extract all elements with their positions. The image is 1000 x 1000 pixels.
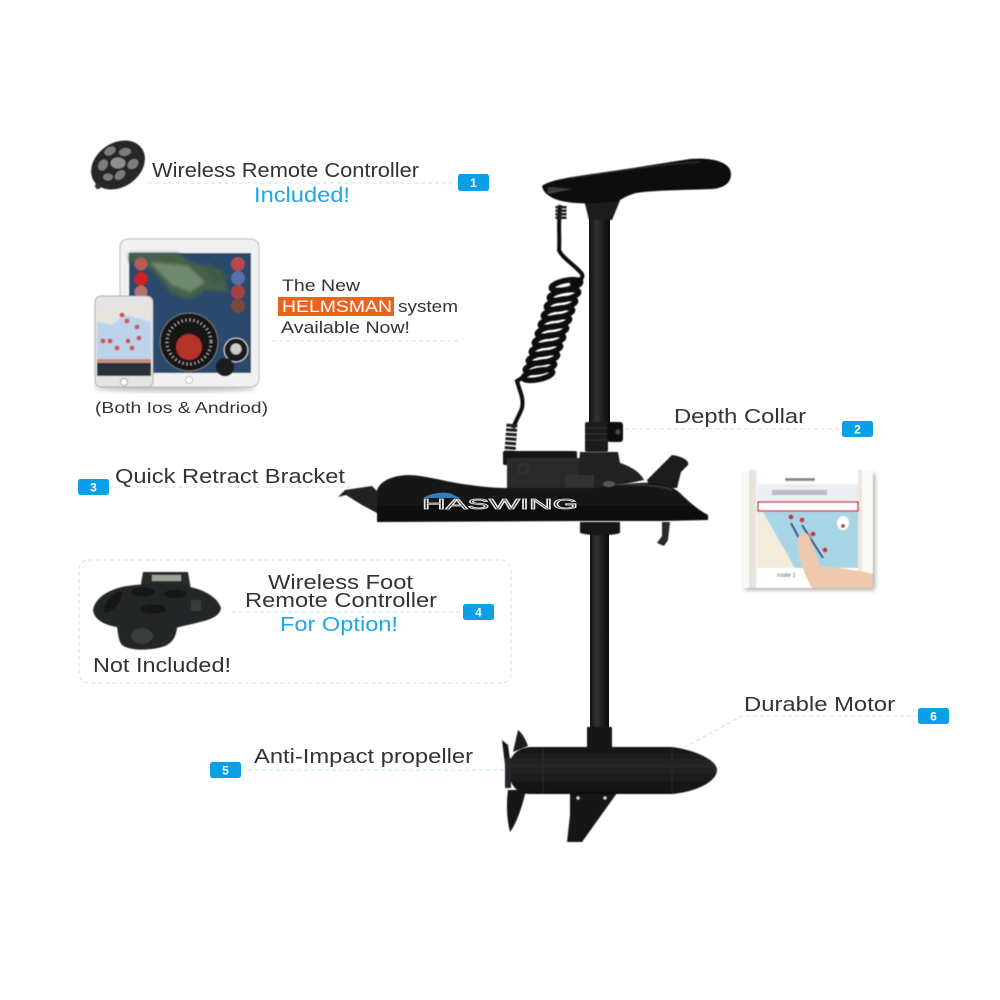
label: anti-impact propeller: Anti-Impact propeller bbox=[254, 746, 473, 768]
cable and coil bbox=[510, 205, 582, 452]
label: not included: Not Included! bbox=[93, 655, 231, 677]
badge 2: 2 bbox=[854, 422, 861, 436]
badge 5 bbox=[210, 762, 241, 778]
caption: both ios and android: (Both Ios & Andriod) bbox=[95, 400, 268, 417]
badge 3 bbox=[78, 479, 109, 495]
badge 2 bbox=[842, 421, 873, 437]
icon: foot pedal bbox=[93, 572, 221, 650]
label: available now: Available Now! bbox=[281, 318, 410, 337]
motor unit bbox=[502, 727, 717, 842]
badge 4 bbox=[463, 604, 494, 620]
badge 6: 6 bbox=[930, 710, 937, 724]
image: app route planning screenshot: route 1 bbox=[777, 573, 796, 579]
image: app route planning screenshot bbox=[743, 470, 875, 590]
panel: wireless foot remote controller bbox=[79, 560, 511, 683]
control box bbox=[503, 451, 644, 490]
label: the new: The New bbox=[282, 276, 361, 295]
shaft lower bbox=[590, 530, 609, 730]
badge 1: 1 bbox=[470, 176, 477, 190]
icon: wireless remote controller bbox=[82, 130, 154, 200]
label: included: Included! bbox=[254, 184, 350, 207]
image: helmsman app on tablet and phone bbox=[93, 239, 259, 392]
label: wireless foot: Wireless Foot bbox=[268, 572, 414, 594]
label: wireless remote controller: Wireless Remote Controller bbox=[152, 160, 419, 182]
label: quick retract bracket: Quick Retract Bracket bbox=[115, 466, 346, 488]
shaft upper bbox=[589, 218, 610, 424]
label: system: system bbox=[398, 297, 458, 316]
quick retract bracket body bbox=[338, 455, 708, 546]
depth collar bbox=[585, 422, 623, 452]
logo: haswing: HASWING bbox=[422, 496, 578, 513]
badge 4: 4 bbox=[475, 606, 482, 620]
label: for option: For Option! bbox=[280, 614, 398, 636]
badge 1 bbox=[458, 174, 489, 191]
logo: haswing bbox=[422, 493, 578, 513]
badge 6 bbox=[918, 708, 949, 724]
label: remote controller: Remote Controller bbox=[245, 590, 437, 612]
badge 5: 5 bbox=[222, 764, 229, 778]
label: durable motor: Durable Motor bbox=[744, 694, 895, 716]
badge 3: 3 bbox=[90, 480, 97, 494]
label: depth collar: Depth Collar bbox=[674, 406, 806, 428]
trolling motor bbox=[338, 159, 731, 842]
handle bbox=[542, 159, 731, 220]
highlight: helmsman: HELMSMAN bbox=[282, 297, 392, 316]
